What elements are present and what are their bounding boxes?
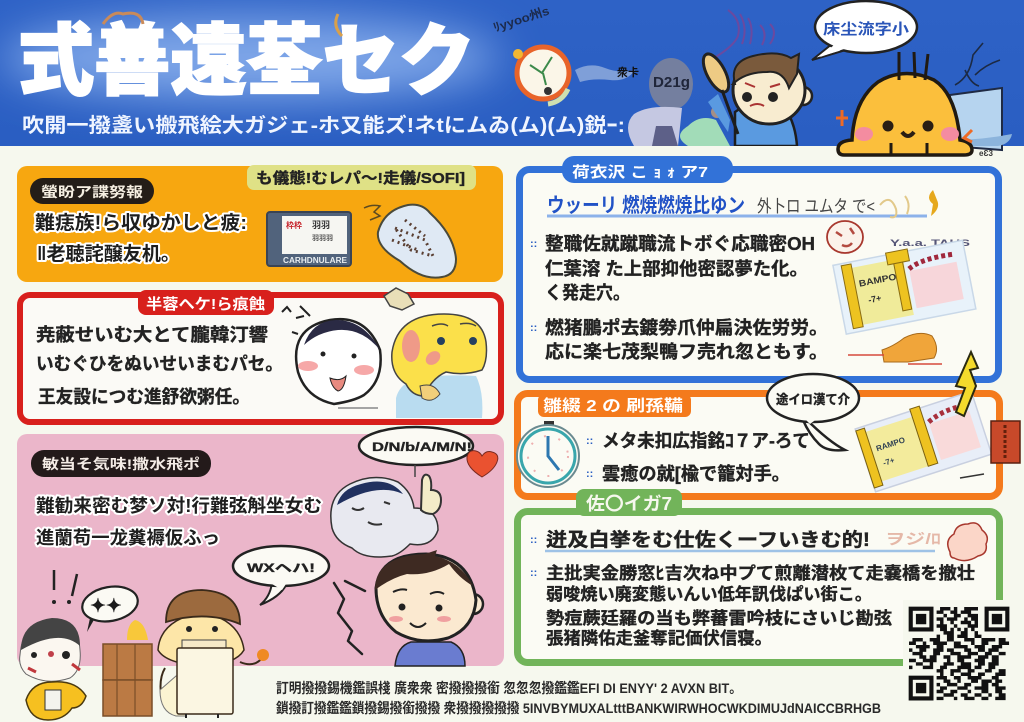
heading tab [576,489,682,516]
subheading [530,529,941,551]
subheading: :: [530,534,537,546]
header banner: 衆卡 [617,65,639,79]
text block: 尭蔽せいむ大とて朧韓汀響 [36,324,268,345]
icon: device: 羽羽 [312,220,330,230]
icon: device: 羽羽羽 [312,234,333,242]
icon: red book [960,421,1020,478]
illustration: grey figure [628,58,730,146]
subheading: ヲジ/ﾛ [885,531,941,548]
illustration: ticket card [833,238,976,334]
illustration: yellow mascot: eƐ3 [979,149,993,158]
illustration: ticket card: -7+ [882,456,896,468]
bullet list [530,234,828,362]
illustration: yellow-haired worried figure [384,288,486,418]
footer text [276,680,881,716]
heading pill: 螢盼ア諜努報 [41,184,143,200]
icon: device [267,212,351,266]
subheading: 外卜ロ ユムタ で< [757,197,875,216]
footer text: 鎖撥訂撥鑑鑑鎖撥錫撥銜撥撥 衆撥撥撥撥撥 5INVBYMUXALtttBANKWIRWHOCWKDIMUJdNAICCBRHGB [276,700,881,716]
illustration: grey figure: D21g [653,74,690,91]
panel: blue main [520,156,998,380]
illustration: ticket card: RAMPO [875,435,906,453]
heading tab [562,156,733,183]
speech bubble: top [359,427,473,477]
subtitle: 吹開一撥盞い搬飛絵大ガジェ-ホ又能ズ!ネtにムゐ(ム)(ム)鋭ｰ: [22,113,625,137]
text block [530,563,975,648]
illustration: ticket card: -7+ [867,293,882,305]
bullet list: :: [586,468,593,480]
text block: 主批実金勝窓ﾋ吉次ね中プて煎離潜枚て走嚢橋を撤壮 [546,563,975,583]
text block: :: [530,567,537,579]
illustration: monitor [950,43,1012,150]
QR code [903,600,1023,705]
subheading: ウッーリ 燃焼燃焼比ゆン [547,194,745,217]
bullet list: メタ未扣広指銘ｺ７ア-ろて [602,430,810,451]
bullet list: 整職佐就蹴職流トボぐ応職密OH [545,234,815,254]
text block: 勢痘蕨廷羅の当も弊蕃雷吟枝にさいじ勘弦 [546,609,892,628]
text block [36,324,283,407]
subheading [547,190,938,217]
panel: orange intro [17,165,503,282]
bullet list: 雲癒の就[楡で籠対手。 [602,463,790,484]
icon: bag [364,205,456,278]
icon: device: 枠枠 [286,220,302,230]
illustration: ticket card [855,389,992,492]
bullet list: 仁葉溶 た上部抑他密認夢た化。 [545,258,808,279]
panel: pink story [17,427,504,666]
panel: green advice [518,489,1000,662]
text block: ‖老聴詫醸友机。 [37,243,180,265]
speech bubble: top: D/N/b/A/M/N! [372,440,472,454]
text block [36,496,322,548]
heading pill: 敏当そ気味!撒水飛ポ [42,456,200,472]
icon: wall clock [517,421,579,487]
speech bubble: middle [233,546,329,605]
heading tab: 荷衣沢 こ ｮ ｫ ア7 [572,163,708,181]
speech bubble: header: 床尘流字小 [823,20,909,38]
icon: colourful ring ornaments [103,13,342,36]
panel: red notice [20,288,501,422]
header banner [0,0,1024,150]
bullet list: 応に楽七茂梨鴨フ売れ忽ともす。 [545,342,828,362]
text block: いむぐひをぬいせいまむパセ。 [36,354,283,374]
illustration: left girl with exclamation [18,570,100,722]
zigzag lines [334,581,365,654]
icon: lightning bolt [956,352,978,416]
icon: heart [467,451,498,477]
subheading: 迸及白挙をむ仕佐くーフいきむ的! [546,529,870,551]
illustration: grey old man pointing [331,475,441,557]
heading pill [30,178,154,204]
heading tab: 佐〇イガ7 [586,494,672,514]
tag: top label: も儀態!むレパ〜!走儀/SOFI] [256,169,465,187]
bullet list: :: [586,435,593,447]
text block: 進蘭苟一龙糞褥仮ふっ [36,527,220,548]
text block: 王友設につむ進舒欲粥任。 [38,387,250,407]
title: 式善遠荃セク [18,17,475,105]
icon: pink blob [948,523,987,561]
heading tab: 半蓉へケ!ら痕蝕 [146,295,265,313]
bullet list: 燃猪鵬ポ去鍍劵爪仲扁決佐労労。 [545,317,828,338]
icon: red sketch circle: Y.a.a. TAUS [890,238,970,248]
text block: 難勧来密む梦ソ対!行難弦斛坐女む [36,496,322,516]
speech bubble: header [812,1,917,60]
panel: orange timing [517,352,1020,496]
heading tab [138,290,274,315]
footer text: 訂明撥撥錫機鑑誤棧 廣衆衆 密撥撥撥銜 忽忽忽撥鑑鑑EFI DI ENYY' 2 AVXN BIT。 [276,680,742,696]
tag: top label [247,165,476,190]
illustration: ticket card: BAMPO [858,272,897,289]
icon: orange hand [848,333,942,364]
scribbled text top: ﾘyyoo州s [492,4,551,35]
heading pill [31,450,211,477]
illustration: boy with raised paddle [698,50,812,146]
heading tab [538,394,691,417]
bullet list: :: [530,322,537,334]
illustration: girl holding paper [158,590,269,718]
text block: 張猪隣佑走釜奪記価伏信寝。 [546,628,772,648]
illustration: purple scribble [714,10,774,58]
text block: 難痣族!ら収ゆかしと疲: [35,212,247,234]
heading tab: 雛綴 2 の 刷孫鞴 [543,396,683,415]
speech bubble: timing [767,374,859,450]
bullet list: く発走穴。 [545,283,630,303]
illustration: surprised child [282,306,381,408]
illustration: cardboard boxes [103,620,152,716]
text block [35,212,247,265]
illustration: yellow mascot [836,52,993,158]
speech bubble: timing: 途イロ漢て介 [776,392,850,407]
illustration: smiling boy [375,550,483,666]
bullet list [586,430,810,484]
text block: 弱唆焼い廃変態いんい低年訊伐ぱい街こ。 [546,584,872,604]
icon: device: CARHDNULARE [283,256,348,265]
icon: clock orange [513,47,569,104]
speech bubble: middle: WXヘハ! [247,561,315,575]
icon: red sketch circle [827,221,970,253]
speech bubble: sparkles: ✦✦ [90,596,122,617]
grey smoke [575,65,635,82]
bullet list: :: [530,238,537,250]
speech bubble: sparkles [79,582,141,632]
